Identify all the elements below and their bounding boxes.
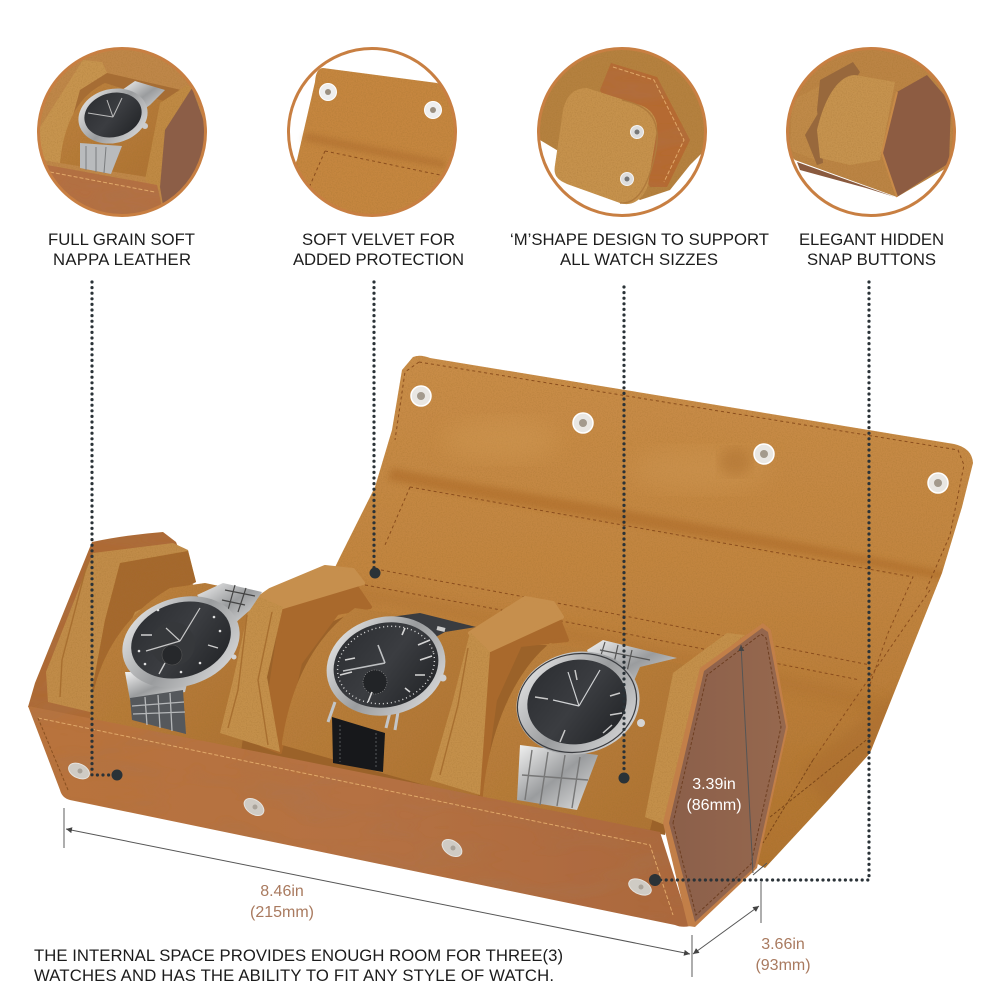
heading: M shape design: ‘M’SHAPE DESIGN TO SUPPORT <box>510 230 769 249</box>
snap buttons on the lid <box>411 386 948 493</box>
heading: soft velvet: SOFT VELVET FOR <box>302 230 455 249</box>
box interior backing <box>90 600 685 835</box>
dimension: length 8.46in: 8.46in <box>260 883 304 900</box>
front leather panel <box>28 706 690 927</box>
dimension: cap height 3.39in: (86mm) <box>686 797 742 814</box>
left end wall <box>28 532 196 725</box>
heading: hidden snap buttons: SNAP BUTTONS <box>807 250 936 269</box>
divider two <box>430 598 567 795</box>
heading: hidden snap buttons <box>799 230 944 269</box>
leather insert <box>600 63 690 187</box>
dimension: cap height 3.39in: 3.39in <box>692 776 736 793</box>
dimension: depth 3.66in: (93mm) <box>755 957 811 974</box>
text block: internal space note <box>34 946 563 985</box>
dimension: cap height 3.39in <box>686 645 753 873</box>
panel: detail circle, snap buttons <box>785 45 960 216</box>
panel: open watch box product <box>28 356 973 927</box>
right leather cap <box>160 88 207 205</box>
watch one, steel bracelet <box>110 582 262 734</box>
dimension: length 8.46in <box>64 808 692 977</box>
heading: full grain soft nappa leather <box>48 230 195 269</box>
right end leather cap <box>663 623 788 927</box>
leather cap <box>882 75 951 197</box>
panel: detail circle, M shape <box>535 48 710 216</box>
heading: soft velvet: ADDED PROTECTION <box>293 250 464 269</box>
dimension: depth 3.66in: 3.66in <box>761 936 805 953</box>
cushion one <box>90 583 262 760</box>
heading: soft velvet <box>293 230 464 269</box>
text block: internal space note: WATCHES AND HAS THE ABILITY TO FIT ANY STYLE OF WATCH. <box>34 966 554 985</box>
heading: M shape design: ALL WATCH SIZZES <box>560 250 718 269</box>
panel: detail circle, soft velvet <box>287 47 457 217</box>
watch two, leather strap <box>316 604 476 772</box>
velvet roller <box>555 88 657 204</box>
cushion three <box>483 643 690 830</box>
leader line: nappa leather <box>92 282 122 780</box>
front leather panel <box>47 165 162 214</box>
right end velvet wall <box>645 633 745 825</box>
heading: M shape design <box>510 230 769 269</box>
dimension: depth 3.66in <box>693 863 811 974</box>
heading: full grain soft nappa leather: NAPPA LEATHER <box>53 250 191 269</box>
divider one <box>220 567 370 752</box>
panel snap rivets <box>66 760 654 898</box>
roller <box>817 75 895 165</box>
leader line: soft velvet <box>370 282 380 578</box>
heading: hidden snap buttons: ELEGANT HIDDEN <box>799 230 944 249</box>
leader line: M shape <box>618 287 630 784</box>
dimension: length 8.46in: (215mm) <box>250 904 314 921</box>
right velvet wall <box>146 90 190 178</box>
watch <box>124 81 165 108</box>
panel: detail circle, nappa leather <box>35 45 210 225</box>
cushion <box>60 83 170 178</box>
lid velvet interior <box>300 356 973 868</box>
watch three, steel bracelet <box>507 640 677 810</box>
left velvet wall <box>35 60 107 163</box>
leader line: snap buttons <box>649 282 869 886</box>
text block: internal space note: THE INTERNAL SPACE PROVIDES ENOUGH ROOM FOR THREE(3) <box>34 946 563 965</box>
heading: full grain soft nappa leather: FULL GRAIN SOFT <box>48 230 195 249</box>
cushion two <box>282 608 490 800</box>
